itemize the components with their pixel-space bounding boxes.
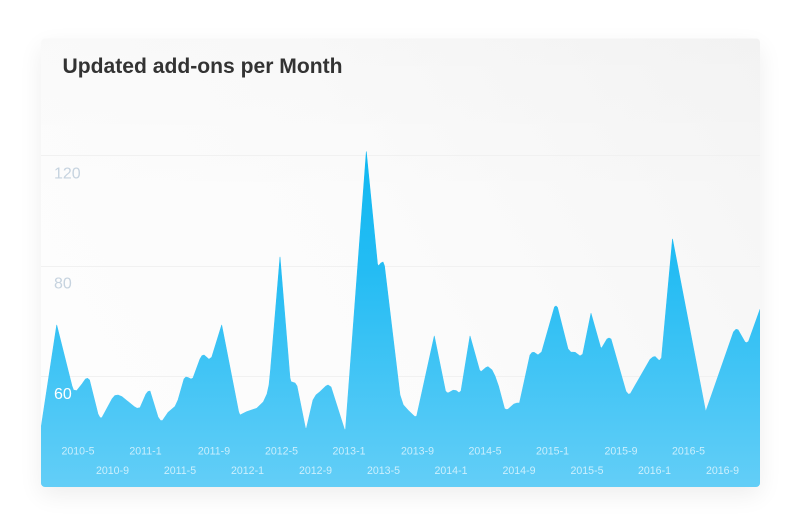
x-axis labels: 2014-1 bbox=[434, 465, 468, 477]
x-axis labels: 2014-9 bbox=[502, 465, 536, 477]
x-axis labels: 2011-9 bbox=[198, 446, 230, 458]
y label 120: 120 bbox=[54, 166, 81, 182]
x-axis labels: 2012-9 bbox=[299, 465, 332, 477]
x-axis labels: 2016-1 bbox=[638, 465, 671, 477]
panel: card background bbox=[41, 38, 760, 487]
x-axis labels: 2010-5 bbox=[62, 446, 95, 458]
y label 60: 60 bbox=[54, 386, 72, 403]
area chart: updated add-ons per month bbox=[41, 152, 760, 488]
x-axis labels: 2016-5 bbox=[672, 446, 705, 458]
x-axis labels: 2011-1 bbox=[129, 446, 162, 458]
x-axis labels: 2011-5 bbox=[164, 465, 196, 477]
y-axis labels bbox=[54, 166, 81, 403]
x-axis labels: 2012-5 bbox=[265, 446, 298, 458]
x-axis labels: 2012-1 bbox=[231, 465, 264, 477]
x-axis labels: 2015-1 bbox=[536, 446, 569, 458]
x-axis labels: 2010-9 bbox=[96, 465, 129, 477]
card shadow bbox=[41, 38, 760, 487]
x-axis labels: 2015-9 bbox=[604, 446, 638, 458]
y label 80: 80 bbox=[54, 276, 72, 292]
title: Updated add-ons per Month bbox=[62, 55, 343, 78]
x-axis labels: 2014-5 bbox=[468, 446, 502, 458]
infographic bbox=[41, 38, 760, 487]
x-axis labels: 2015-5 bbox=[570, 465, 604, 477]
x-axis labels: 2013-9 bbox=[401, 446, 434, 458]
x-axis labels bbox=[62, 446, 739, 477]
x-axis labels: 2013-1 bbox=[332, 446, 366, 458]
x-axis labels: 2016-9 bbox=[706, 465, 739, 477]
x-axis labels: 2013-5 bbox=[367, 465, 400, 477]
